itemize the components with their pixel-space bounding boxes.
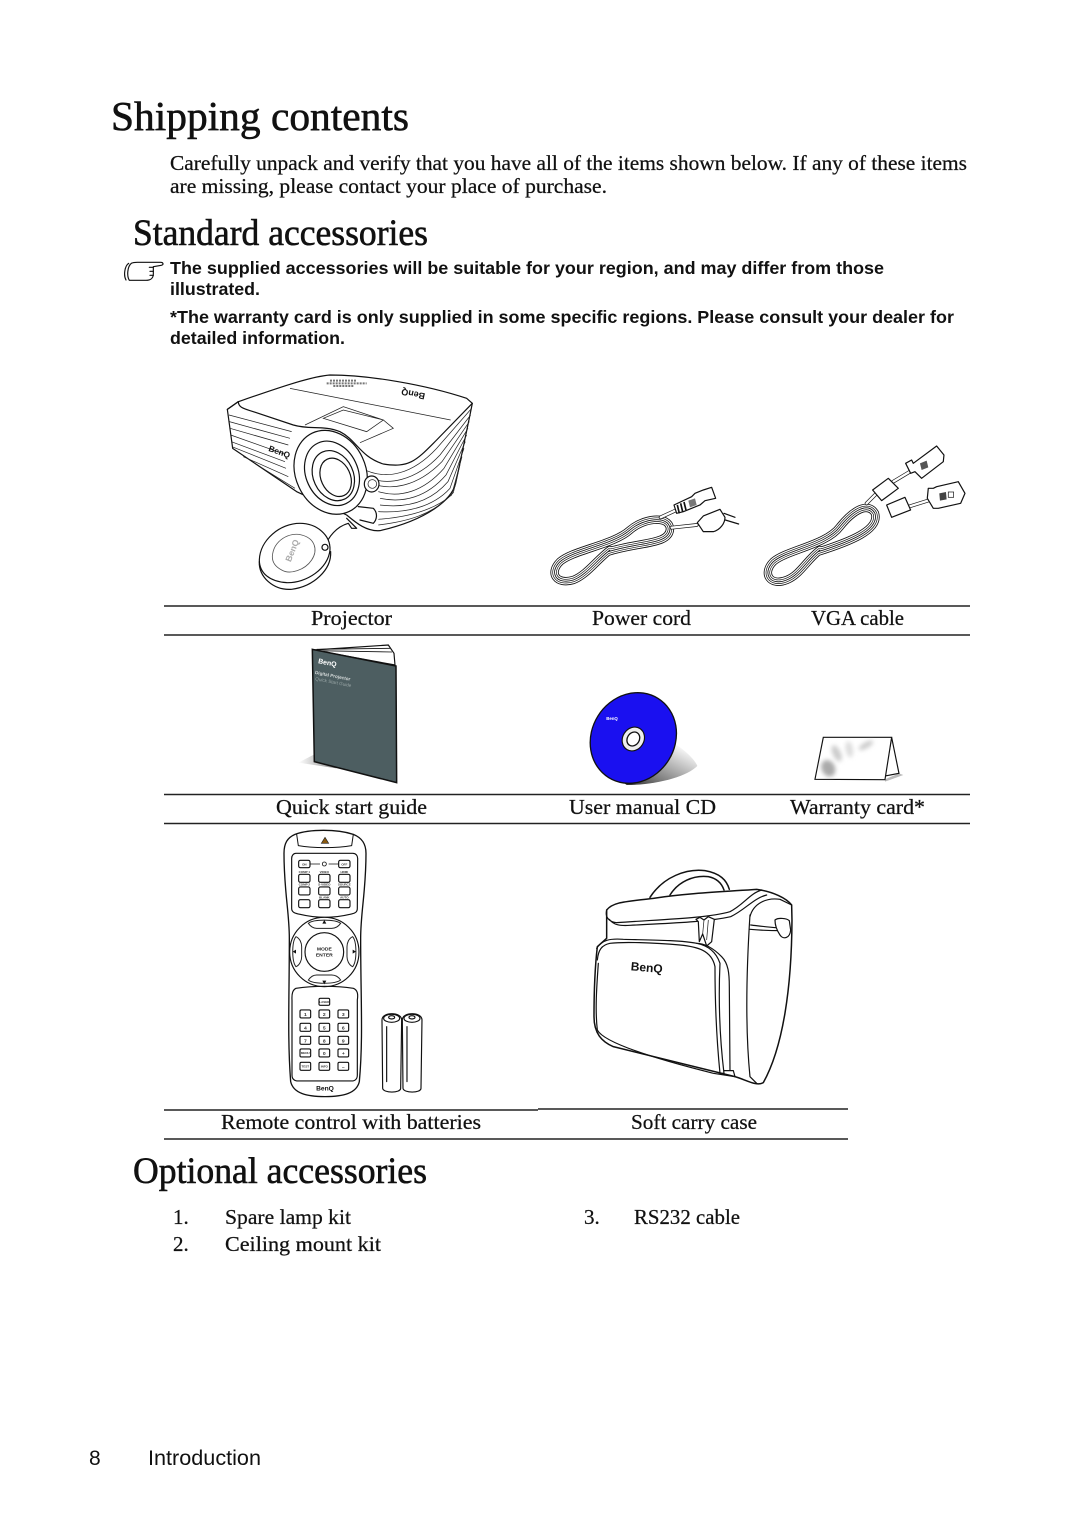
illustration: soft carry case — [594, 870, 792, 1084]
intro paragraph: Carefully unpack and verify that you have all of the items shown below. If any of these items — [170, 151, 967, 175]
illustration: remote control — [284, 830, 366, 1097]
illustration: remote control: – — [342, 1064, 345, 1070]
table rule lines — [164, 606, 970, 1139]
illustration: user manual CD: BenQ — [606, 716, 618, 721]
list: optional accessories: Ceiling mount kit — [225, 1232, 381, 1256]
illustration: remote control: LASER — [319, 1000, 330, 1004]
labels row 1: Power cord — [592, 606, 692, 630]
labels row 2: User manual CD — [569, 795, 716, 819]
illustration: remote control: OFF — [341, 862, 347, 866]
list: optional accessories: Spare lamp kit — [225, 1205, 351, 1229]
title: Shipping contents: Shipping contents — [111, 93, 409, 139]
illustration: remote control: BLANK — [319, 895, 330, 899]
illustration: remote control: COMP 2 — [299, 883, 310, 887]
illustration: remote control: 9 — [342, 1038, 345, 1044]
list: optional accessories: RS232 cable — [634, 1205, 740, 1229]
illustration: remote control: 5 — [323, 1025, 326, 1031]
note: supplied accessories: The supplied accessories will be suitable for your region, and may differ from those — [170, 258, 884, 278]
illustration: remote control: BenQ — [316, 1085, 334, 1092]
illustration: projector with lens cap: BenQ — [283, 538, 301, 563]
illustration: quick start guide booklet: Quick Start Guide — [315, 676, 352, 688]
illustration: remote control: ENTER — [316, 952, 333, 958]
list: optional accessories: 3. — [584, 1205, 600, 1229]
illustration: remote control: + — [342, 1051, 345, 1057]
illustration: power cord — [555, 487, 739, 581]
note: warranty card — [170, 307, 954, 348]
heading: Optional accessories: Optional accessories — [133, 1151, 427, 1192]
labels row 3: Soft carry case — [631, 1110, 757, 1134]
intro paragraph — [170, 151, 967, 198]
illustration: quick start guide booklet: BenQ — [317, 658, 338, 669]
illustration: projector with lens cap: BenQ — [267, 443, 292, 460]
note: supplied accessories: illustrated. — [170, 279, 260, 299]
illustration: remote control: INFO — [321, 1065, 329, 1069]
intro paragraph: are missing, please contact your place of purchase. — [170, 174, 607, 198]
illustration: remote control: ON — [302, 862, 307, 866]
illustration: remote control: S-VIDEO — [318, 883, 331, 887]
illustration: remote control: 2 — [323, 1012, 326, 1018]
footer: page number and section — [89, 1447, 261, 1470]
illustration: remote control: MENU — [301, 1051, 310, 1055]
heading: Standard accessories: Standard accessories — [133, 213, 428, 254]
list: optional accessories: 2. — [173, 1232, 189, 1256]
illustration: VGA cable — [768, 446, 965, 582]
illustration: remote control: HDMI — [341, 870, 348, 874]
labels row 2 — [276, 795, 925, 819]
list: optional accessories: 1. — [173, 1205, 189, 1229]
illustration: soft carry case: BenQ — [630, 959, 663, 976]
illustration: remote control: 6 — [342, 1025, 345, 1031]
illustration: remote control: COMP 1 — [299, 870, 310, 874]
illustration: remote control: 4 — [304, 1025, 307, 1031]
illustration: remote control: 7 — [304, 1038, 307, 1044]
labels row 2: Quick start guide — [276, 795, 427, 819]
illustration: remote control: 0 — [323, 1051, 326, 1057]
illustration: quick start guide booklet — [298, 645, 397, 783]
footer: page number and section: Introduction — [148, 1447, 261, 1470]
illustration: remote control: TEST — [302, 1065, 309, 1069]
note: warranty card: detailed information. — [170, 328, 345, 348]
list: optional accessories — [173, 1205, 740, 1256]
illustration: remote control: MODE — [317, 947, 332, 953]
labels row 1: VGA cable — [811, 606, 904, 630]
labels row 3: Remote control with batteries — [221, 1110, 481, 1134]
illustration: remote control: SOURCE — [338, 883, 351, 887]
illustration: warranty card — [815, 737, 903, 782]
illustration: quick start guide booklet: Digital Projector — [315, 670, 351, 682]
illustration: projector with lens cap: BenQ — [400, 387, 426, 401]
illustration: user manual CD — [573, 676, 697, 800]
illustration: remote control: 8 — [323, 1038, 326, 1044]
illustration: remote control: 3 — [342, 1012, 345, 1018]
illustration: remote control: 1 — [304, 1012, 307, 1018]
icon: pointing hand — [125, 262, 163, 280]
illustration: remote control: AUTO — [340, 895, 349, 899]
labels row 3 — [221, 1110, 757, 1134]
illustration: batteries — [382, 1014, 422, 1092]
note: supplied accessories — [170, 258, 884, 299]
footer: page number and section: 8 — [89, 1447, 101, 1470]
labels row 1 — [311, 606, 904, 630]
note: warranty card: *The warranty card is only supplied in some specific regions. Please consult your dealer for — [170, 307, 954, 327]
labels row 2: Warranty card* — [790, 795, 925, 819]
illustration: projector with lens cap — [227, 375, 472, 589]
illustration: remote control: VIDEO — [320, 870, 330, 874]
labels row 1: Projector — [311, 606, 392, 630]
